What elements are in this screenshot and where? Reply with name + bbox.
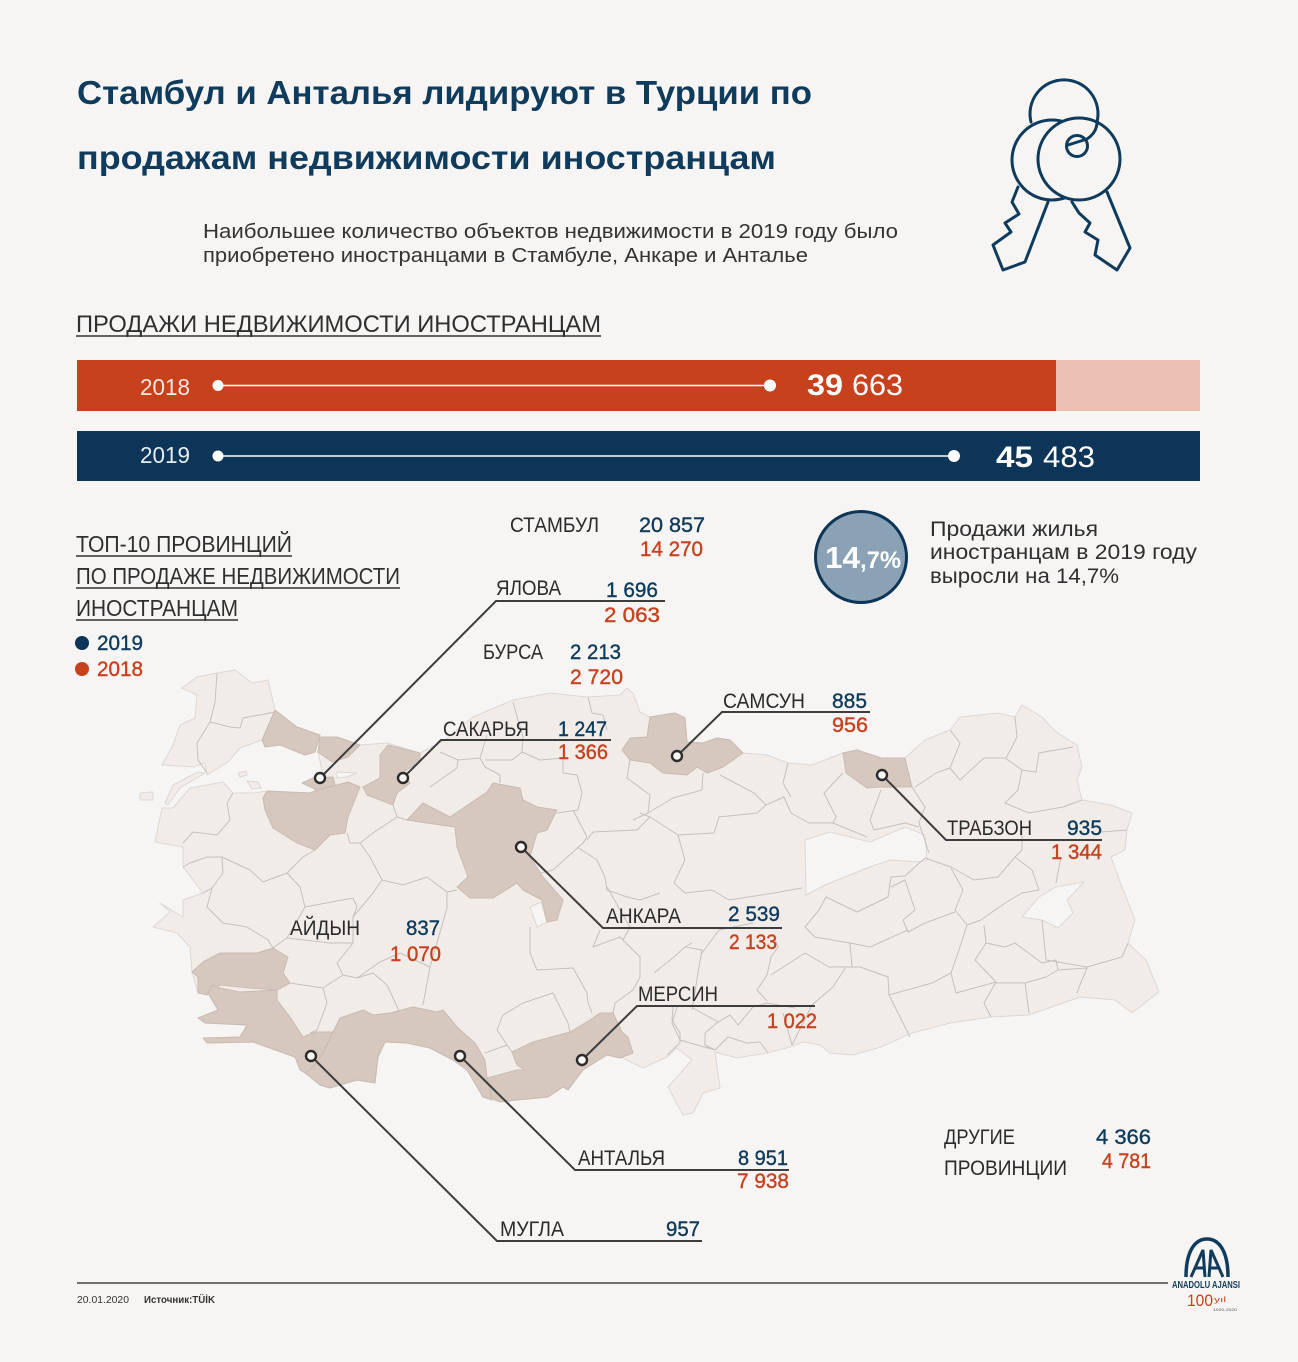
- label: Aydin: [290, 916, 441, 966]
- label: Trabzon: [877, 770, 1102, 864]
- label: Ankara: 2 539: [728, 903, 780, 926]
- label: other provinces: [944, 1126, 1151, 1180]
- label: Antalya: 7 938: [737, 1170, 789, 1193]
- logo: Anadolu Agency: 100: [1187, 1291, 1213, 1310]
- subtitle text: приобретено иностранцами в Стамбуле, Анкаре и Анталье: [203, 244, 808, 267]
- region: Bursa: [263, 782, 360, 850]
- label: Aydin: 837: [406, 917, 440, 940]
- footer: Источник:TÜİK: [144, 1293, 216, 1306]
- logo: Anadolu Agency: ANADOLU AJANSI: [1172, 1280, 1240, 1291]
- section heading: sales to foreigners: ПРОДАЖИ НЕДВИЖИМОСТИ ИНОСТРАНЦАМ: [76, 311, 601, 338]
- label: other provinces: ПРОВИНЦИИ: [944, 1157, 1067, 1180]
- bar: 2018 sales: 2018: [140, 374, 190, 400]
- label: Bursa: [483, 641, 623, 689]
- label: Istanbul: 20 857: [639, 514, 705, 537]
- label: Sakarya: САКАРЬЯ: [443, 718, 529, 741]
- callout text: Продажи жилья: [930, 518, 1098, 541]
- footer: 20.01.2020: [77, 1295, 129, 1306]
- heading: top 10 provinces: ТОП-10 ПРОВИНЦИЙ: [76, 530, 292, 557]
- label: Samsun: [672, 690, 870, 761]
- region: Istanbul: [262, 710, 360, 762]
- subtitle text: [203, 220, 898, 267]
- label: Bursa: БУРСА: [483, 641, 543, 664]
- label: Ankara: 2 133: [729, 931, 777, 954]
- heading: top 10 provinces: [76, 530, 400, 621]
- callout text: иностранцам в 2019 году: [930, 541, 1198, 564]
- bar: 2018 sales: 663: [852, 369, 903, 402]
- callout: 14.7% growth: [816, 512, 906, 602]
- title: [77, 74, 812, 176]
- region: Trabzon: [843, 750, 912, 788]
- label: Bursa: 2 720: [570, 666, 623, 689]
- label: Ankara: АНКАРА: [606, 905, 681, 928]
- label: Samsun: 956: [832, 714, 868, 737]
- legend: 2019: [97, 632, 143, 655]
- region: Mersin: [487, 1013, 633, 1102]
- region: Mugla: [198, 985, 333, 1073]
- footer: [77, 1283, 1168, 1306]
- label: Aydin: АЙДЫН: [290, 916, 360, 940]
- label: Mugla: [306, 1051, 702, 1241]
- logo: Anadolu Agency: [1172, 1239, 1240, 1312]
- map: province borders: [183, 673, 1128, 1055]
- callout text: выросли на 14,7%: [930, 565, 1119, 588]
- label: Mugla: 957: [666, 1218, 700, 1241]
- region: Ankara: [407, 783, 563, 922]
- callout text: [930, 518, 1198, 588]
- label: Yalova: ЯЛОВА: [496, 577, 561, 600]
- label: Sakarya: 1 247: [558, 718, 607, 741]
- subtitle text: Наибольшее количество объектов недвижимости в 2019 году было: [203, 220, 898, 243]
- label: Mersin: [577, 983, 817, 1065]
- map of Turkey: [140, 670, 1159, 1115]
- label: Ankara: [516, 842, 782, 954]
- logo: Anadolu Agency: 1920-2020: [1213, 1307, 1238, 1312]
- label: Samsun: САМСУН: [723, 690, 805, 713]
- label: Antalya: АНТАЛЬЯ: [578, 1147, 665, 1170]
- label: Istanbul: СТАМБУЛ: [510, 514, 599, 537]
- title: Стамбул и Анталья лидируют в Турции по: [77, 74, 812, 111]
- label: Mersin: МЕРСИН: [638, 983, 718, 1006]
- region: Aydin: [192, 948, 290, 995]
- callout: 14.7% growth: ,7%: [860, 547, 901, 574]
- heading: top 10 provinces: ПО ПРОДАЖЕ НЕДВИЖИМОСТИ: [76, 563, 400, 589]
- heading: top 10 provinces: ИНОСТРАНЦАМ: [76, 595, 238, 621]
- label: Bursa: 2 213: [570, 641, 621, 664]
- title: продажам недвижимости иностранцам: [77, 139, 776, 176]
- label: Aydin: 1 070: [390, 943, 441, 966]
- map: highlighted provinces: [192, 710, 912, 1102]
- label: Sakarya: [398, 718, 611, 783]
- region: Sakarya: [363, 745, 420, 805]
- label: Yalova: 2 063: [604, 604, 660, 627]
- label: other provinces: 4 366: [1096, 1126, 1151, 1149]
- bar: 2019 sales: 483: [1043, 441, 1095, 474]
- bar: 2019 sales: 2019: [140, 442, 190, 468]
- region: Samsun: [622, 713, 743, 775]
- icon: keys: [993, 80, 1130, 270]
- label: Antalya: 8 951: [738, 1147, 788, 1170]
- bar: 2019 sales: 45: [996, 441, 1033, 474]
- bar: 2019 sales: [77, 431, 1200, 481]
- label: Antalya: [455, 1051, 789, 1193]
- bar: 2018 sales: [77, 360, 1200, 411]
- region: Antalya: [305, 1007, 492, 1100]
- label: Trabzon: ТРАБЗОН: [947, 817, 1032, 840]
- label: Trabzon: 935: [1067, 817, 1102, 840]
- region: Yalova: [302, 777, 335, 790]
- callout: 14.7% growth: 14: [825, 540, 861, 575]
- label: other provinces: ДРУГИЕ: [944, 1126, 1015, 1149]
- label: Istanbul: [510, 514, 705, 561]
- logo: Anadolu Agency: yıl: [1214, 1297, 1227, 1304]
- label: Trabzon: 1 344: [1051, 841, 1102, 864]
- label: Yalova: 1 696: [606, 579, 658, 602]
- label: other provinces: 4 781: [1102, 1150, 1151, 1173]
- label: Sakarya: 1 366: [558, 741, 608, 764]
- label: Istanbul: 14 270: [640, 538, 703, 561]
- map: blank area and lakes: [337, 772, 1084, 928]
- label: Mugla: МУГЛА: [500, 1218, 564, 1241]
- label: Samsun: 885: [832, 690, 867, 713]
- map: land base: [140, 670, 1159, 1115]
- bar: 2018 sales: 39: [807, 369, 843, 402]
- label: Yalova: [315, 577, 665, 783]
- legend: 2018: [97, 658, 143, 681]
- label: Mersin: 1 022: [767, 1010, 817, 1033]
- legend: [75, 632, 143, 681]
